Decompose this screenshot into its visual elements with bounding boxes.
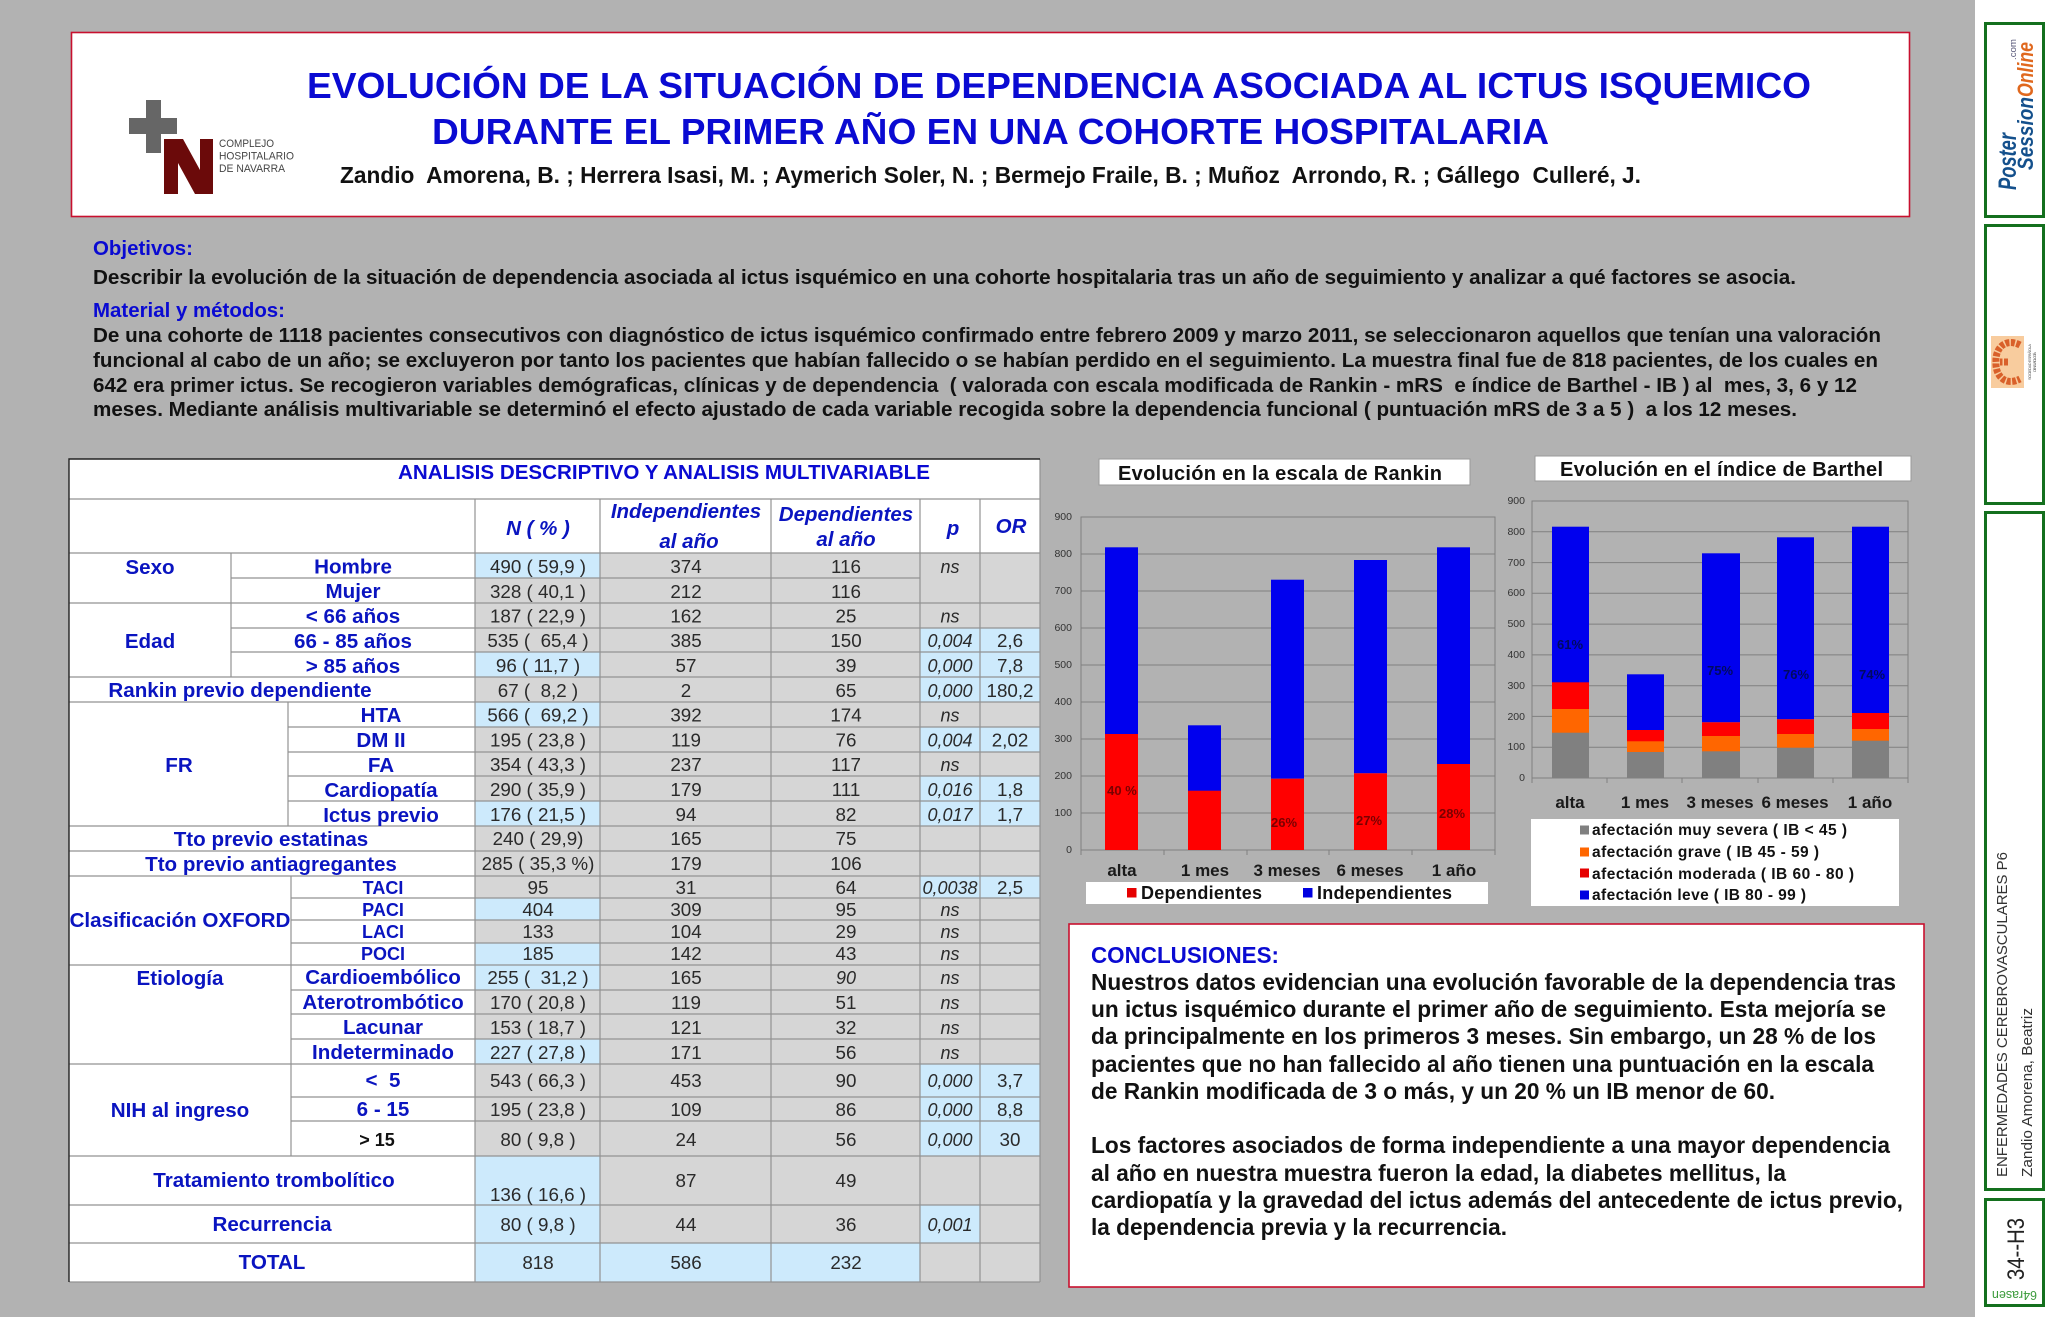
sidebar: poster number: 34--H3 (2003, 1218, 2030, 1280)
row group: NIH al ingreso: 0,000 (927, 1071, 973, 1091)
row group: etiología: Lacunar (343, 1016, 423, 1039)
row group: FR: 0,016 (927, 780, 974, 800)
panel: header (72, 32, 1910, 216)
row group: etiología: 121 (670, 1017, 702, 1038)
row group: clasificación OXFORD: 185 (522, 943, 554, 964)
row: tratamiento trombolítico: 136 ( 16,6 ) (490, 1184, 586, 1205)
row group: NIH al ingreso: 195 ( 23,8 ) (490, 1099, 586, 1120)
row group: edad: 0,000 (927, 656, 973, 676)
text block: objetivos (93, 237, 1796, 289)
row: tto previo antiagregantes: 285 ( 35,3 %) (482, 853, 594, 874)
y axis and gridlines: 300 (1054, 733, 1072, 745)
conclusions paragraph 2: cardiopatía y la gravedad del ictus además del antecedente de ictus previo, (1091, 1187, 1903, 1213)
row group: clasificación OXFORD: 104 (670, 921, 702, 942)
table: analisis descriptivo y multivariable (69, 459, 1040, 1282)
x axis labels: 3 meses (1686, 793, 1754, 812)
row group: FR: 1,7 (997, 804, 1023, 825)
y axis and gridlines: 500 (1507, 618, 1525, 630)
text block: objetivos: Describir la evolución de la situación de dependencia asociada al ictus isquémico en una cohorte hospitalaria tras un año de seguimiento y analizar a qué factores se asocia. (93, 267, 1796, 289)
x axis labels: 3 meses (1253, 861, 1321, 880)
row: tto previo antiagregantes (145, 853, 862, 876)
row group: NIH al ingreso: 24 (676, 1129, 696, 1150)
row group: edad: 162 (670, 606, 702, 626)
sidebar: session and author: Zandio Amorena, Beatriz (2019, 1008, 2036, 1177)
row group: FR: 111 (832, 779, 860, 800)
table column headers: al año (659, 530, 719, 553)
conclusions paragraph 1: Nuestros datos evidencian una evolución favorable de la dependencia tras (1091, 969, 1896, 995)
row group: etiología: 119 (671, 992, 701, 1013)
row group: clasificación OXFORD: POCI (361, 944, 405, 964)
row group: edad: 25 (836, 606, 856, 626)
row group: etiología: Aterotrombótico (302, 991, 464, 1014)
y axis and gridlines: 700 (1054, 585, 1072, 597)
row: tratamiento trombolítico: 87 (676, 1170, 696, 1191)
row: tto previo antiagregantes: 179 (670, 853, 702, 874)
x axis labels: 6 meses (1336, 861, 1404, 880)
row group: NIH al ingreso: 30 (1000, 1129, 1020, 1150)
row group: FR: 82 (836, 804, 856, 825)
row: tto previo antiagregantes: Tto previo antiagregantes (145, 853, 397, 876)
row group: clasificación OXFORD: 95 (836, 899, 856, 920)
row group: NIH al ingreso: 86 (836, 1099, 856, 1120)
row group: clasificación OXFORD: 95 (528, 877, 548, 898)
row: tto previo estatinas: 240 ( 29,9) (493, 828, 583, 849)
row group: sexo: Hombre (314, 556, 392, 578)
text block: material y métodos: De una cohorte de 1118 pacientes consecutivos con diagnóstico de ictus isquémico confirmado entre febrero 2009 y marzo 2011, se seleccionaron aquellos que tenían una valoración (93, 325, 1881, 347)
x axis labels: 1 mes (1181, 861, 1229, 880)
row: recurrencia: 0,001 (927, 1215, 973, 1235)
conclusions paragraph 1 (1091, 969, 1896, 1104)
y axis and gridlines (1507, 495, 1908, 784)
row group: clasificación OXFORD: PACI (362, 900, 404, 920)
sidebar: PosterSessionOnline logo: Poster (1994, 132, 2022, 190)
row group: etiología: 56 (836, 1042, 856, 1063)
bars (1552, 527, 1889, 778)
row group: NIH al ingreso: 3,7 (997, 1070, 1023, 1091)
percentage labels: 40 % (1107, 783, 1137, 798)
row group: FR: Ictus previo (323, 804, 439, 827)
row group: NIH al ingreso: 90 (836, 1070, 856, 1091)
row: total: 586 (670, 1252, 702, 1273)
row: tto previo estatinas: 165 (670, 828, 702, 849)
conclusions paragraph 2: Los factores asociados de forma independiente a una mayor dependencia (1091, 1132, 1890, 1158)
row group: NIH al ingreso: 56 (836, 1129, 856, 1150)
legend: Dependientes (1141, 883, 1262, 903)
row group: NIH al ingreso: 80 ( 9,8 ) (500, 1129, 576, 1150)
row group: FR: 117 (831, 754, 861, 775)
x axis labels: 1 mes (1621, 793, 1669, 812)
row group: etiología: Cardioembólico (305, 966, 461, 989)
conclusions paragraph 1: de Rankin modificada de 3 o más, y un 20 % un IB menor de 60. (1091, 1078, 1775, 1104)
row group: edad: > 85 años (306, 655, 400, 678)
chart: evolución en la escala de Rankin (1054, 459, 1495, 904)
row: tto previo estatinas: Tto previo estatinas (174, 828, 368, 851)
authors: Zandio Amorena, B. ; Herrera Isasi, M. ; Aymerich Soler, N. ; Bermejo Fraile, B. ; Muñoz Arrondo, R. ; Gállego Culleré, J. (340, 162, 1641, 188)
x axis labels: alta (1107, 861, 1137, 880)
table column headers: OR (996, 515, 1027, 538)
logo: Complejo Hospitalario de Navarra (129, 100, 294, 194)
row group: etiología: 171 (670, 1042, 702, 1063)
row group: clasificación OXFORD: TACI (363, 878, 403, 898)
percentage labels (1557, 637, 1885, 682)
y axis and gridlines: 200 (1507, 711, 1525, 723)
row group: FR: 195 ( 23,8 ) (490, 730, 586, 750)
logo: Complejo Hospitalario de Navarra: HOSPITALARIO (219, 150, 294, 162)
row group: NIH al ingreso: 0,000 (927, 1100, 973, 1120)
table column headers: al año (816, 528, 876, 551)
row group: FR: ns (940, 755, 960, 775)
y axis and gridlines: 500 (1054, 659, 1072, 671)
row: rankin previo dependiente: 2 (681, 680, 691, 701)
row group: NIH al ingreso: 0,000 (927, 1130, 973, 1150)
row: total: 232 (830, 1252, 862, 1273)
row group: clasificación OXFORD: 309 (670, 899, 702, 920)
row group: etiología: ns (940, 993, 960, 1013)
legend: afectación muy severa ( IB < 45 ) (1592, 822, 1847, 839)
y axis and gridlines: 600 (1507, 587, 1525, 599)
row group: clasificación OXFORD: 404 (522, 899, 554, 920)
row group: sexo: 116 (831, 581, 861, 602)
row group: etiología: ns (940, 968, 960, 988)
row group: etiología: 51 (836, 992, 856, 1013)
row group: etiología (137, 966, 960, 1064)
row group: NIH al ingreso: 109 (670, 1099, 702, 1120)
row group: NIH al ingreso: NIH al ingreso (111, 1099, 249, 1122)
row group: FR: 566 ( 69,2 ) (487, 704, 589, 726)
y axis and gridlines: 900 (1507, 495, 1525, 507)
row group: sexo: ns (940, 557, 960, 577)
y axis and gridlines: 0 (1066, 844, 1072, 856)
row group: etiología: 255 ( 31,2 ) (487, 967, 589, 988)
row group: FR: 94 (676, 804, 696, 825)
y axis and gridlines: 100 (1507, 741, 1525, 753)
row: rankin previo dependiente: 67 ( 8,2 ) (498, 680, 578, 701)
row group: FR: FA (368, 754, 394, 777)
row group: NIH al ingreso (111, 1069, 1023, 1150)
panel: conclusiones (1069, 924, 1924, 1287)
row group: FR: HTA (361, 704, 402, 727)
row: recurrencia: 44 (676, 1214, 696, 1235)
row group: edad: 2,6 (997, 630, 1023, 651)
row group: edad: ns (940, 606, 960, 626)
row group: FR: 1,8 (997, 779, 1023, 800)
row group: clasificación OXFORD (70, 877, 1023, 964)
row group: FR (165, 704, 1028, 827)
y axis and gridlines: 400 (1507, 649, 1525, 661)
percentage labels: 26% (1271, 815, 1297, 830)
row group: etiología: Indeterminado (312, 1041, 454, 1064)
row group: FR: 176 ( 21,5 ) (490, 804, 586, 825)
row group: FR: DM II (356, 729, 406, 752)
row group: sexo: 490 ( 59,9 ) (490, 556, 586, 577)
x axis labels: 1 año (1432, 861, 1476, 880)
x axis labels (1555, 793, 1892, 812)
legend: afectación moderada ( IB 60 - 80 ) (1592, 866, 1854, 883)
row group: clasificación OXFORD: ns (940, 900, 960, 920)
row group: FR: 179 (670, 779, 702, 800)
sidebar: PosterSessionOnline logo (1986, 24, 2044, 216)
chart title: Evolución en la escala de Rankin (1118, 463, 1442, 485)
sidebar: poster number: 64rasen (1992, 1288, 2037, 1303)
row group: NIH al ingreso: 6 - 15 (357, 1098, 409, 1121)
percentage labels: 61% (1557, 637, 1583, 652)
y axis and gridlines (1054, 511, 1495, 856)
x axis labels: 6 meses (1761, 793, 1829, 812)
row: tto previo estatinas: 75 (836, 828, 856, 849)
legend (1086, 882, 1488, 904)
table title: ANALISIS DESCRIPTIVO Y ANALISIS MULTIVARIABLE (398, 461, 930, 484)
y axis and gridlines: 700 (1507, 557, 1525, 569)
legend (1531, 819, 1899, 906)
row group: clasificación OXFORD: 43 (836, 943, 856, 964)
row: rankin previo dependiente: 65 (836, 680, 856, 701)
bars (1105, 547, 1470, 850)
table column headers: p (946, 517, 959, 540)
row group: FR: 119 (671, 730, 701, 750)
title (307, 64, 1811, 152)
y axis and gridlines: 400 (1054, 696, 1072, 708)
row: tratamiento trombolítico: Tratamiento trombolítico (153, 1169, 395, 1192)
y axis and gridlines: 800 (1507, 526, 1525, 538)
row group: clasificación OXFORD: Clasificación OXFORD (70, 909, 290, 932)
table column headers: Dependientes (779, 503, 913, 526)
chart: evolución en el índice de Barthel (1507, 456, 1911, 906)
row group: edad (125, 605, 1023, 678)
sidebar: PosterSessionOnline logo: Session (2013, 97, 2038, 170)
sidebar: PosterSessionOnline logo: Online (2013, 42, 2038, 97)
table column headers: Independientes (611, 500, 761, 523)
row group: etiología: Etiología (137, 967, 224, 990)
row group: FR: 392 (670, 704, 702, 726)
y axis and gridlines: 100 (1054, 807, 1072, 819)
percentage labels (1107, 783, 1465, 830)
conclusions heading: CONCLUSIONES: (1091, 942, 1279, 968)
row group: edad: < 66 años (306, 605, 400, 628)
row group: clasificación OXFORD: 142 (670, 943, 702, 964)
conclusions paragraph 2: al año en nuestra muestra fueron la edad, la diabetes mellitus, la (1091, 1160, 1786, 1186)
y axis and gridlines: 600 (1054, 622, 1072, 634)
row group: etiología: ns (940, 1043, 960, 1063)
row group: clasificación OXFORD: 29 (836, 921, 856, 942)
row group: FR: Cardiopatía (324, 779, 438, 802)
row: tto previo estatinas (174, 828, 856, 851)
row group: edad: 535 ( 65,4 ) (487, 630, 589, 651)
row group: sexo: 328 ( 40,1 ) (490, 581, 586, 602)
row group: edad: 150 (830, 630, 862, 651)
row group: FR: 354 ( 43,3 ) (490, 754, 586, 775)
row group: etiología: ns (940, 1018, 960, 1038)
percentage labels: 74% (1859, 667, 1885, 682)
legend: afectación grave ( IB 45 - 59 ) (1592, 844, 1819, 861)
y axis and gridlines: 900 (1054, 511, 1072, 523)
row group: FR: 237 (670, 754, 702, 775)
row group: clasificación OXFORD: ns (940, 944, 960, 964)
conclusions paragraph 2: la dependencia previa y la recurrencia. (1091, 1214, 1507, 1240)
row group: clasificación OXFORD: LACI (362, 922, 404, 942)
row group: etiología: 227 ( 27,8 ) (490, 1042, 586, 1063)
row group: FR: ns (940, 706, 960, 726)
sidebar: Sociedad Española de Neurología logo: SOCIEDAD ESPAÑOLA (2027, 344, 2032, 380)
title: DURANTE EL PRIMER AÑO EN UNA COHORTE HOSPITALARIA (432, 110, 1549, 152)
row group: sexo: Mujer (326, 580, 380, 603)
conclusions paragraph 1: un ictus isquémico durante el primer año de seguimiento. Esta mejoría se (1091, 996, 1886, 1022)
row group: FR: 76 (836, 730, 856, 750)
row group: edad: 7,8 (997, 655, 1023, 676)
row group: sexo: Sexo (125, 556, 175, 579)
row group: clasificación OXFORD: 64 (836, 877, 856, 898)
row: tratamiento trombolítico (153, 1169, 856, 1205)
row group: FR: 174 (830, 704, 862, 726)
y axis and gridlines: 200 (1054, 770, 1072, 782)
row group: NIH al ingreso: > 15 (359, 1130, 395, 1150)
text block: material y métodos: Material y métodos: (93, 299, 285, 322)
row: total: 818 (522, 1252, 554, 1273)
row group: clasificación OXFORD: 31 (676, 877, 696, 898)
row group: edad: Edad (125, 630, 175, 653)
row: rankin previo dependiente: 0,000 (927, 681, 973, 701)
text block: material y métodos: meses. Mediante análisis multivariable se determinó el efecto ajustado de cada variable recogida sobre la dependencia funcional ( puntuación mRS de 3 a 5 ) a los 12 meses. (93, 399, 1797, 421)
y axis and gridlines: 300 (1507, 680, 1525, 692)
row group: FR: 0,017 (927, 805, 974, 825)
row group: NIH al ingreso: 543 ( 66,3 ) (490, 1070, 586, 1091)
row: recurrencia (212, 1213, 973, 1236)
table column headers: N ( % ) (506, 517, 570, 540)
row group: edad: 39 (836, 655, 856, 676)
row: rankin previo dependiente: 180,2 (986, 680, 1034, 701)
row group: NIH al ingreso: 8,8 (997, 1099, 1023, 1120)
row: total (239, 1251, 862, 1274)
logo: Complejo Hospitalario de Navarra: COMPLEJO (219, 138, 274, 150)
row group: etiología: 32 (836, 1017, 856, 1038)
row: recurrencia: Recurrencia (212, 1213, 332, 1236)
conclusions paragraph 2 (1091, 1132, 1903, 1240)
row group: sexo: 116 (831, 556, 861, 577)
sidebar: PosterSessionOnline logo: .com (2008, 39, 2018, 60)
row group: etiología: 153 ( 18,7 ) (490, 1017, 586, 1038)
y axis and gridlines: 0 (1519, 772, 1525, 784)
row group: FR: 2,02 (992, 730, 1028, 750)
chart title: Evolución en el índice de Barthel (1560, 459, 1883, 481)
row group: edad: 0,004 (927, 631, 973, 651)
x axis labels: alta (1555, 793, 1585, 812)
row group: sexo: 212 (670, 581, 702, 602)
row group: NIH al ingreso: 453 (670, 1070, 702, 1091)
conclusions paragraph 1: da principalmente en los primeros 3 meses. Sin embargo, un 28 % de los (1091, 1023, 1876, 1049)
row: tto previo antiagregantes: 106 (830, 853, 862, 874)
row group: edad: 57 (676, 655, 696, 676)
row: rankin previo dependiente (108, 679, 1034, 702)
title: EVOLUCIÓN DE LA SITUACIÓN DE DEPENDENCIA ASOCIADA AL ICTUS ISQUEMICO (307, 64, 1811, 106)
row group: etiología: 90 (836, 968, 856, 988)
sidebar: session and author: ENFERMEDADES CEREBROVASCULARES P6 (1994, 852, 2011, 1177)
row group: etiología: 170 ( 20,8 ) (490, 992, 586, 1013)
x axis labels: 1 año (1848, 793, 1892, 812)
row group: edad: 66 - 85 años (294, 630, 412, 653)
row group: edad: 385 (670, 630, 702, 651)
row group: sexo (125, 556, 960, 603)
text block: material y métodos (93, 299, 1881, 421)
row group: edad: 187 ( 22,9 ) (490, 606, 586, 626)
row group: sexo: 374 (670, 556, 702, 577)
conclusions paragraph 1: pacientes que no han fallecido al año tienen una puntuación en la escala (1091, 1051, 1874, 1077)
sidebar: session and author (1986, 512, 2044, 1190)
y axis and gridlines: 800 (1054, 548, 1072, 560)
row group: FR: 0,004 (927, 730, 973, 750)
x axis labels (1107, 861, 1476, 880)
text block: material y métodos: funcional al cabo de un año; se excluyeron por tanto los pacientes que habían fallecido o se habían perdido en el seguimiento. La muestra final fue de 818 pacientes, de los cuales en (93, 350, 1878, 372)
row: tratamiento trombolítico: 49 (836, 1170, 856, 1191)
row: rankin previo dependiente: Rankin previo dependiente (108, 679, 372, 702)
row group: FR: 290 ( 35,9 ) (490, 779, 586, 800)
row group: clasificación OXFORD: 2,5 (997, 877, 1023, 898)
row: total: TOTAL (239, 1251, 305, 1274)
table column headers (506, 500, 1027, 553)
percentage labels: 76% (1783, 667, 1809, 682)
text block: material y métodos: 642 era primer ictus. Se recogieron variables demógraficas, clínicas y de dependencia ( valorada con escala modificada de Rankin - mRS e índice de Barthel - IB ) al mes, 3, 6 y 12 (93, 375, 1857, 397)
percentage labels: 27% (1356, 813, 1382, 828)
legend: Independientes (1317, 883, 1452, 903)
row group: etiología: 165 (670, 967, 702, 988)
row: recurrencia: 80 ( 9,8 ) (500, 1214, 576, 1235)
sidebar: Sociedad Española de Neurología logo: DE NEUROLOGÍA (2032, 352, 2037, 372)
row group: clasificación OXFORD: 133 (522, 921, 554, 942)
row group: edad: 96 ( 11,7 ) (496, 655, 580, 676)
sidebar: poster number (1986, 1200, 2044, 1306)
row group: clasificación OXFORD: ns (940, 922, 960, 942)
row: recurrencia: 36 (836, 1214, 856, 1235)
logo: Complejo Hospitalario de Navarra: DE NAVARRA (219, 163, 286, 175)
row group: clasificación OXFORD: 0,0038 (922, 878, 978, 898)
percentage labels: 75% (1707, 663, 1733, 678)
legend: afectación leve ( IB 80 - 99 ) (1592, 887, 1806, 904)
row group: NIH al ingreso: < 5 (366, 1069, 400, 1092)
percentage labels: 28% (1439, 806, 1465, 821)
text block: objetivos: Objetivos: (93, 237, 193, 260)
row group: FR: FR (165, 754, 193, 777)
sidebar: Sociedad Española de Neurología logo (1986, 226, 2044, 504)
